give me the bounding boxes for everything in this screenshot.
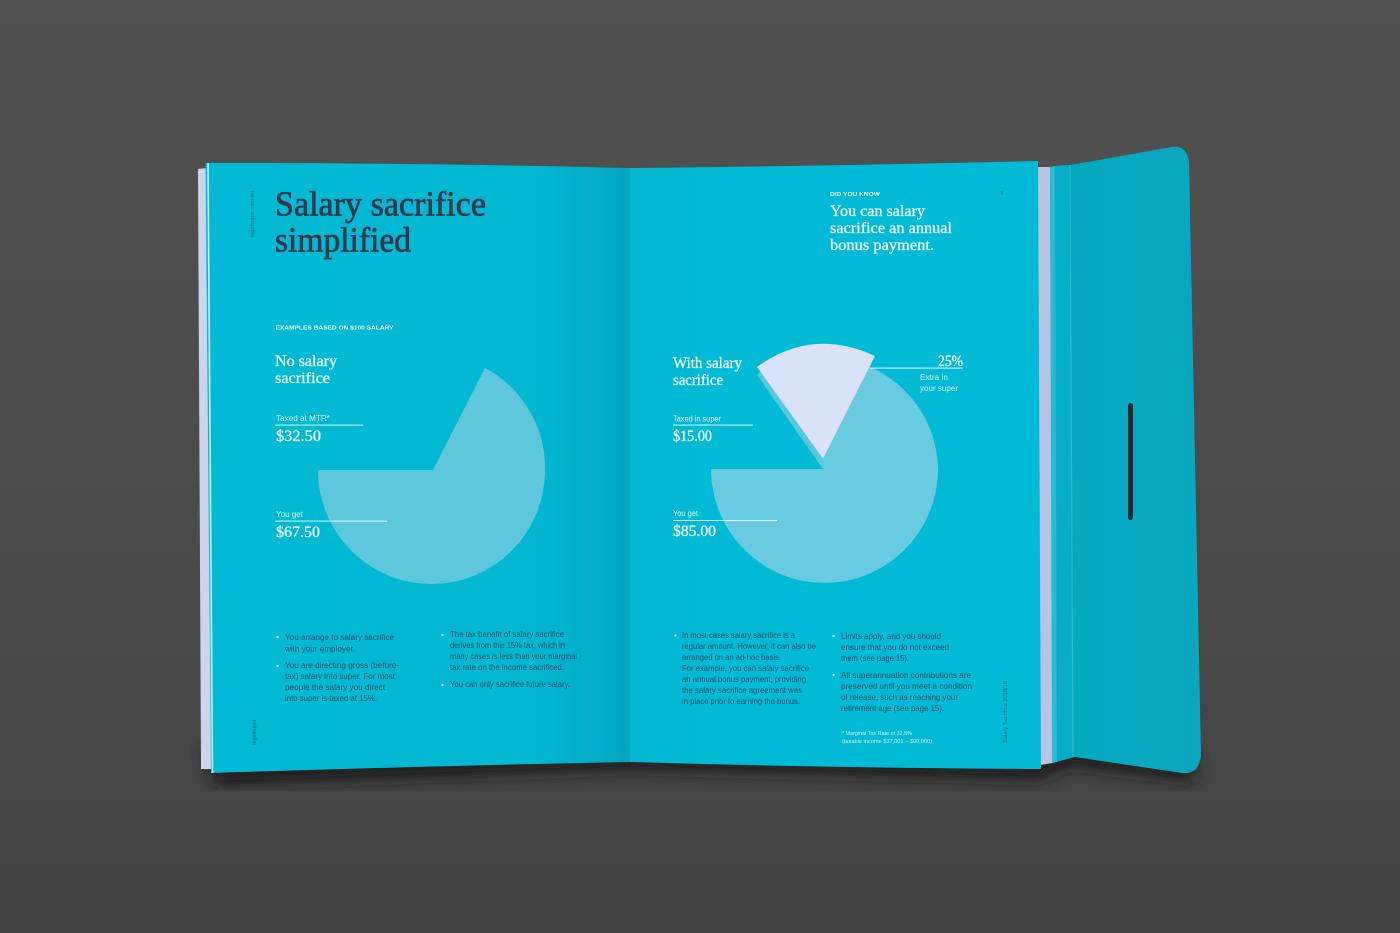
bullets: left column: with your employer.	[284, 644, 355, 654]
bullets: right column: The tax benefit of salary sacrifice	[450, 629, 564, 639]
vertical edition: Salary Sacrifice 2018/19	[1003, 681, 1009, 743]
bullets: column one: in place prior to earning the bonus.	[682, 696, 800, 706]
pie chart: with salary sacrifice	[711, 344, 938, 583]
panel: left page	[206, 163, 630, 773]
bullets: left column: people the salary you direct	[285, 682, 386, 692]
bullets: left column	[276, 632, 399, 703]
bullets: column two	[832, 631, 972, 713]
bullets: right column: You can only sacrifice future salary.	[450, 679, 570, 689]
footnote	[842, 731, 932, 745]
callout: did you know: DID YOU KNOW	[830, 192, 881, 198]
bullets: column one: For example, you can salary sacrifice	[682, 663, 809, 673]
label: taxed at MTR: $32.50	[276, 428, 321, 445]
wedge shadow	[757, 371, 824, 470]
heading: with salary sacrifice	[673, 355, 742, 389]
bullets: column two: of release, such as reaching your	[841, 692, 958, 702]
bullets: column one: In most cases salary sacrifice is a	[682, 630, 795, 640]
eyebrow heading: EXAMPLES BASED ON $100 SALARY	[276, 326, 394, 332]
panel: right page	[630, 161, 1041, 769]
callout: did you know	[830, 192, 953, 254]
bullets: right column: many cases is less than your marginal	[450, 651, 577, 661]
heading: no salary sacrifice: No salary	[275, 353, 337, 370]
page stack edges	[198, 166, 1057, 769]
heading: no salary sacrifice: sacrifice	[275, 370, 330, 387]
footnote: (taxable income $37,001 – $90,000)	[842, 739, 932, 745]
footnote: * Marginal Tax Rate of 32.5%	[842, 731, 912, 737]
book shadow	[205, 745, 1196, 786]
title: simplified	[275, 220, 411, 260]
bullets: column two: ensure that you do not exceed	[841, 642, 949, 652]
heading: with salary sacrifice: With salary	[673, 355, 742, 372]
bullets: left column: You arrange to salary sacrifice	[285, 632, 394, 642]
bullets: column one: arranged on an ad-hoc basis.	[682, 652, 781, 662]
callout: 25% extra in your super: Extra in	[920, 372, 948, 382]
bullets: right column: tax rate on the income sacrificed.	[450, 662, 564, 672]
heading: no salary sacrifice	[275, 353, 337, 387]
label: you get: You get	[673, 508, 699, 518]
bullets: column two: preserved until you meet a condition	[841, 681, 972, 691]
vertical brand: legalsuper	[252, 719, 258, 745]
callout: 25% extra in your super: 25%	[938, 353, 963, 370]
label: you get: $67.50	[276, 524, 320, 541]
extracted wedge	[757, 344, 875, 458]
flap slot	[1128, 403, 1133, 520]
heading: with salary sacrifice: sacrifice	[673, 372, 723, 389]
fold-out flap	[1054, 147, 1201, 773]
bullets: column two: Limits apply, and you should	[841, 631, 941, 641]
bullets: column one: the salary sacrifice agreement was	[682, 685, 802, 695]
callout: 25% extra in your super	[870, 353, 963, 393]
page number: 8	[1000, 191, 1004, 197]
bullets: column two: All superannuation contributions are	[841, 670, 971, 680]
vertical url: legalsuper.com.au	[250, 191, 256, 237]
bullets: left column: You are directing gross (before-	[285, 660, 399, 670]
callout: did you know: sacrifice an annual	[830, 220, 953, 237]
label: taxed at MTR	[275, 413, 363, 445]
label: taxed at MTR: Taxed at MTR*	[276, 413, 331, 423]
bullets: right column: derives from this 15% tax, which in	[450, 640, 565, 650]
label: you get	[673, 508, 777, 540]
bullets: left column: tax) salary into super. For most	[285, 671, 396, 681]
label: you get: You get	[276, 509, 304, 519]
callout: did you know: You can salary	[830, 203, 925, 220]
label: you get	[275, 509, 387, 541]
bullets: column two: them (see page 15).	[841, 653, 909, 663]
label: you get: $85.00	[673, 523, 716, 540]
label: taxed in super	[673, 414, 753, 445]
bullets: column one: an annual bonus payment, providing	[682, 674, 806, 684]
bullets: column one	[674, 630, 816, 706]
bullets: left column: into super is taxed at 15%.	[285, 693, 377, 703]
bullets: column one: regular amount. However, it can also be	[682, 641, 816, 651]
callout: 25% extra in your super: your super	[920, 383, 958, 393]
title: Salary sacrifice	[275, 184, 486, 224]
callout: did you know: bonus payment.	[830, 237, 934, 254]
bullets: column two: retirement age (see page 15).	[841, 703, 944, 713]
title	[275, 184, 486, 260]
bullets: right column	[441, 629, 577, 689]
label: taxed in super: Taxed in super	[673, 414, 721, 424]
pie chart: no salary sacrifice	[318, 368, 545, 584]
label: taxed in super: $15.00	[673, 428, 712, 445]
